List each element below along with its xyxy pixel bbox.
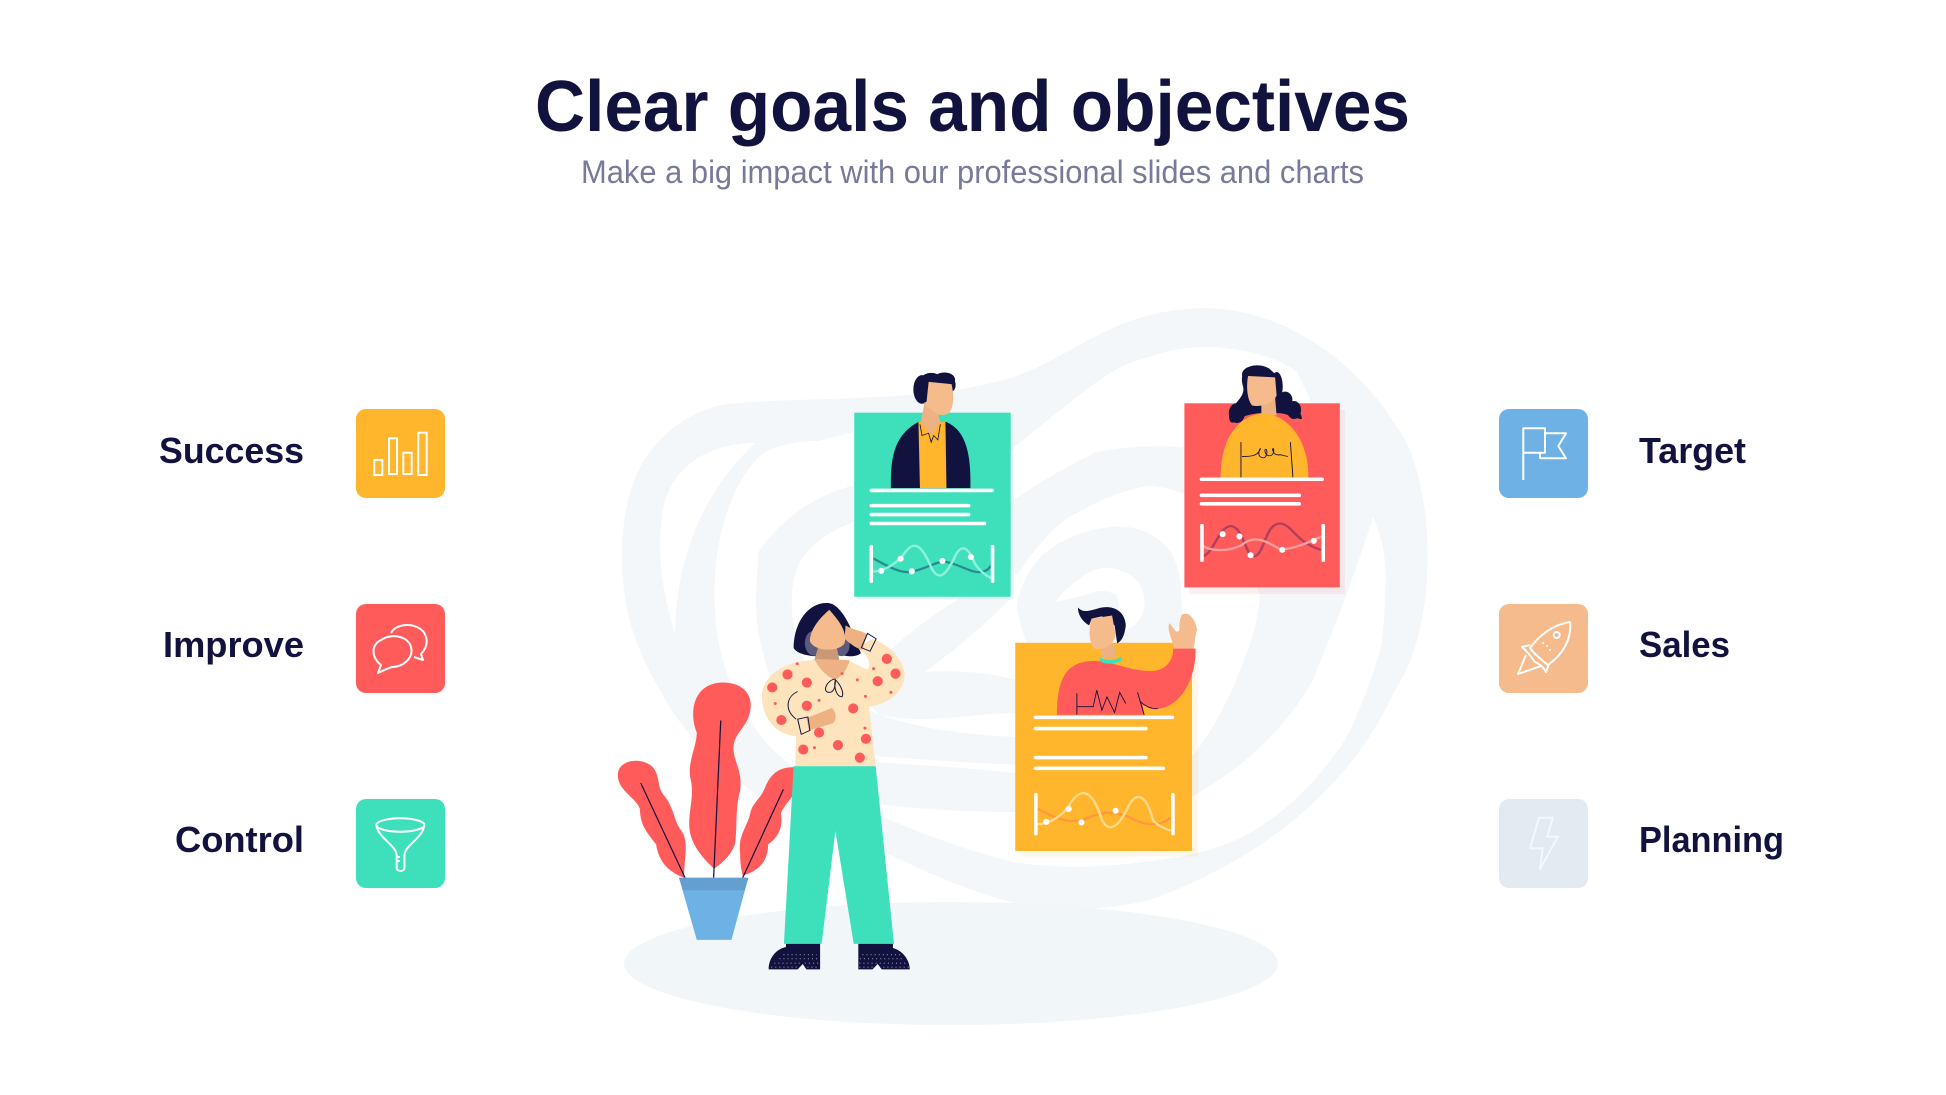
raised hand [845,625,867,650]
forearm [806,708,836,730]
yellow profile card [1015,607,1198,856]
subtitle: Make a big impact with our professional slides and charts [581,154,1364,190]
icon tile: planning bolt [1499,799,1588,888]
icon tile: sales rocket [1499,604,1588,693]
red profile card [1184,365,1345,594]
icon tile: success bars [356,409,445,498]
blouse [762,639,905,766]
man in dark jacket [891,372,970,488]
left label: Success: Success [159,430,304,471]
right label: Target: Target [1639,430,1746,471]
right label: Planning: Planning [1639,819,1784,860]
icon tile: control funnel [356,799,445,888]
left label: Control: Control [175,819,304,860]
neck [814,648,839,661]
icon tile: improve speech bubbles [356,604,445,693]
cuffs and tie [788,633,876,734]
standing woman [762,603,910,969]
background swirl [622,308,1428,909]
title: Clear goals and objectives [535,67,1410,147]
hair [794,603,861,656]
illustration group [618,365,1345,969]
left label: Improve: Improve [163,624,304,665]
man in red sweater waving [1057,607,1197,715]
pants [784,766,894,944]
teal card chart [870,545,994,583]
right label: Sales: Sales [1639,624,1730,665]
red card chart [1200,523,1325,562]
icon tile: target flag [1499,409,1588,498]
shoes [769,944,910,969]
teal profile card [854,372,1014,599]
face [810,610,845,650]
woman in yellow sweater [1221,365,1308,477]
yellow card chart [1034,793,1175,835]
blouse polka dots [767,654,901,763]
ground ellipse [624,902,1278,1025]
potted plant [618,683,796,940]
